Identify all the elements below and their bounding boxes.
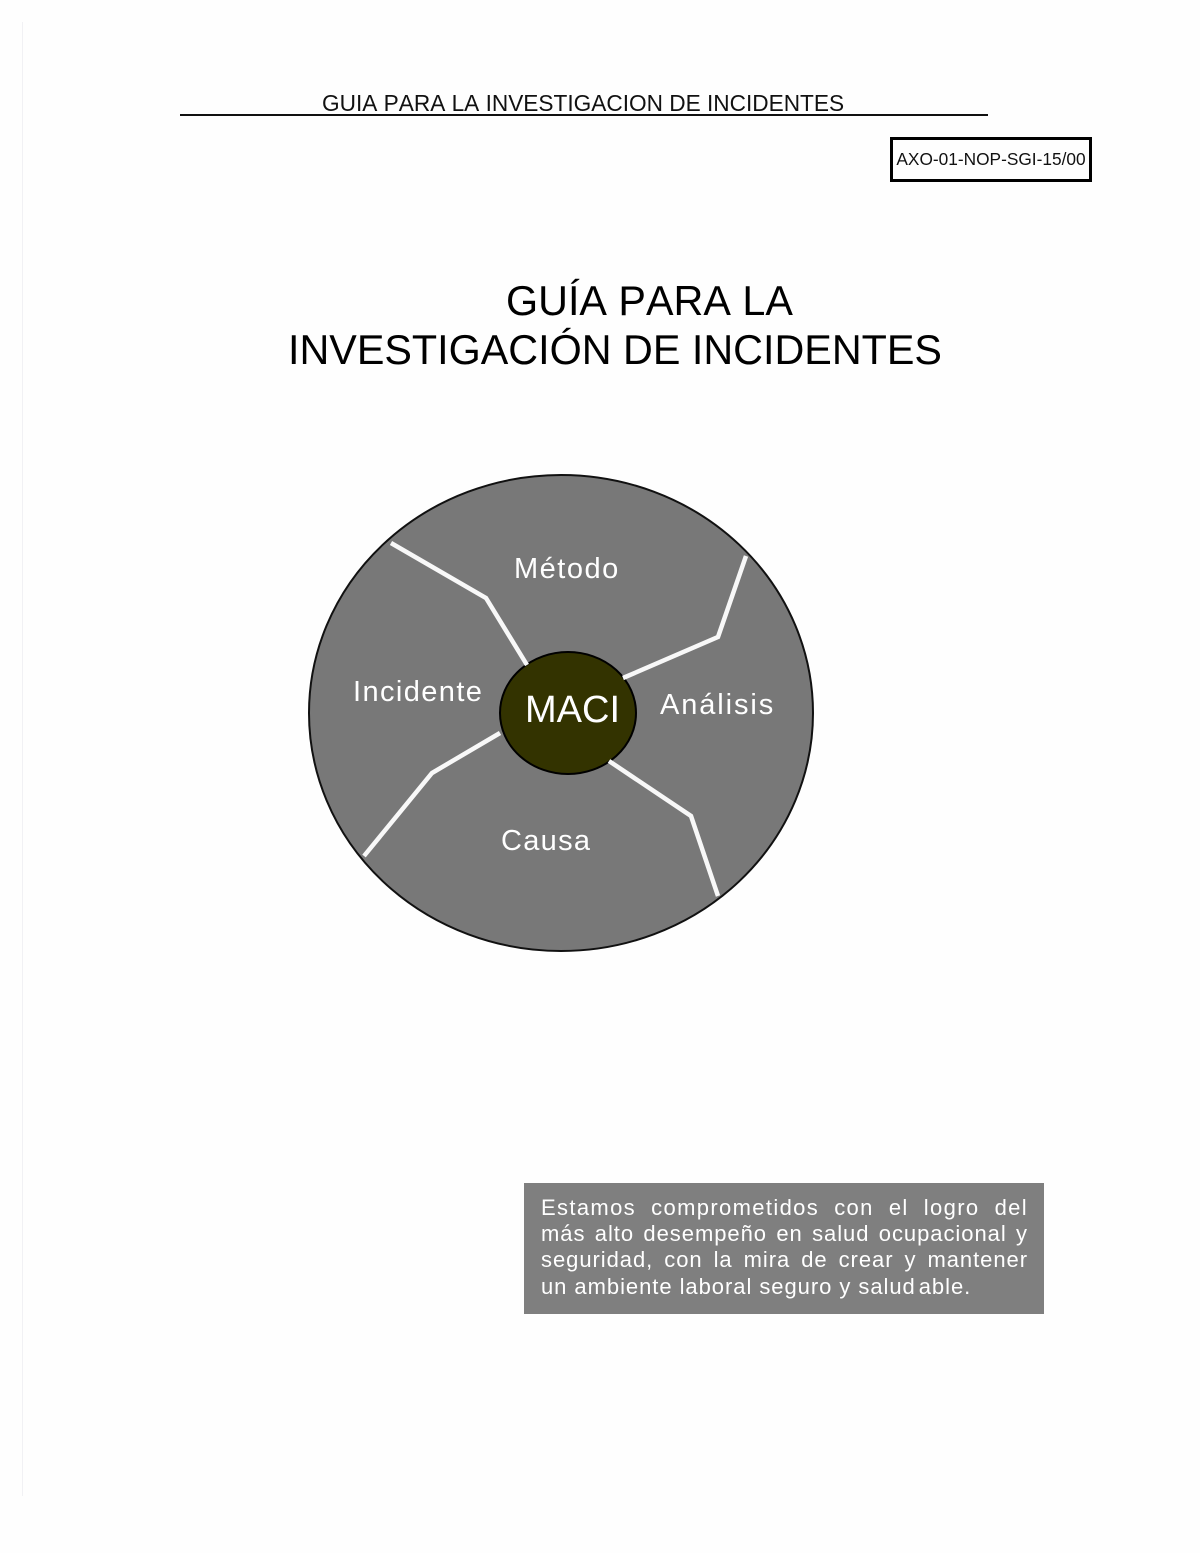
main title: INVESTIGACIÓN DE INCIDENTES bbox=[288, 327, 942, 373]
center circle bbox=[500, 652, 636, 774]
document code box: AXO-01-NOP-SGI-15/00 bbox=[896, 149, 1086, 169]
MACI circular diagram bbox=[308, 474, 814, 952]
commitment statement: Estamos comprometidos con el logro del bbox=[541, 1195, 1028, 1220]
commitment statement: seguridad, con la mira de crear y mantener bbox=[541, 1247, 1028, 1272]
commitment statement: más alto desempeño en salud ocupacional y bbox=[541, 1221, 1028, 1246]
segment labels: Incidente bbox=[353, 676, 483, 708]
segment labels: Método bbox=[514, 553, 620, 585]
outer circle bbox=[309, 475, 813, 951]
segment labels: Análisis bbox=[660, 689, 775, 721]
commitment statement bbox=[524, 1183, 1044, 1314]
main title: GUÍA PARA LA bbox=[506, 278, 793, 324]
segment labels: Causa bbox=[501, 825, 591, 857]
commitment statement: un ambiente laboral seguro y saludable. bbox=[541, 1274, 971, 1299]
main title bbox=[288, 278, 942, 373]
white dividers bbox=[364, 543, 746, 896]
center label: MACI bbox=[525, 689, 620, 731]
document code box bbox=[890, 137, 1092, 182]
running header: GUIA PARA LA INVESTIGACION DE INCIDENTES bbox=[322, 90, 844, 116]
segment labels bbox=[353, 553, 775, 857]
